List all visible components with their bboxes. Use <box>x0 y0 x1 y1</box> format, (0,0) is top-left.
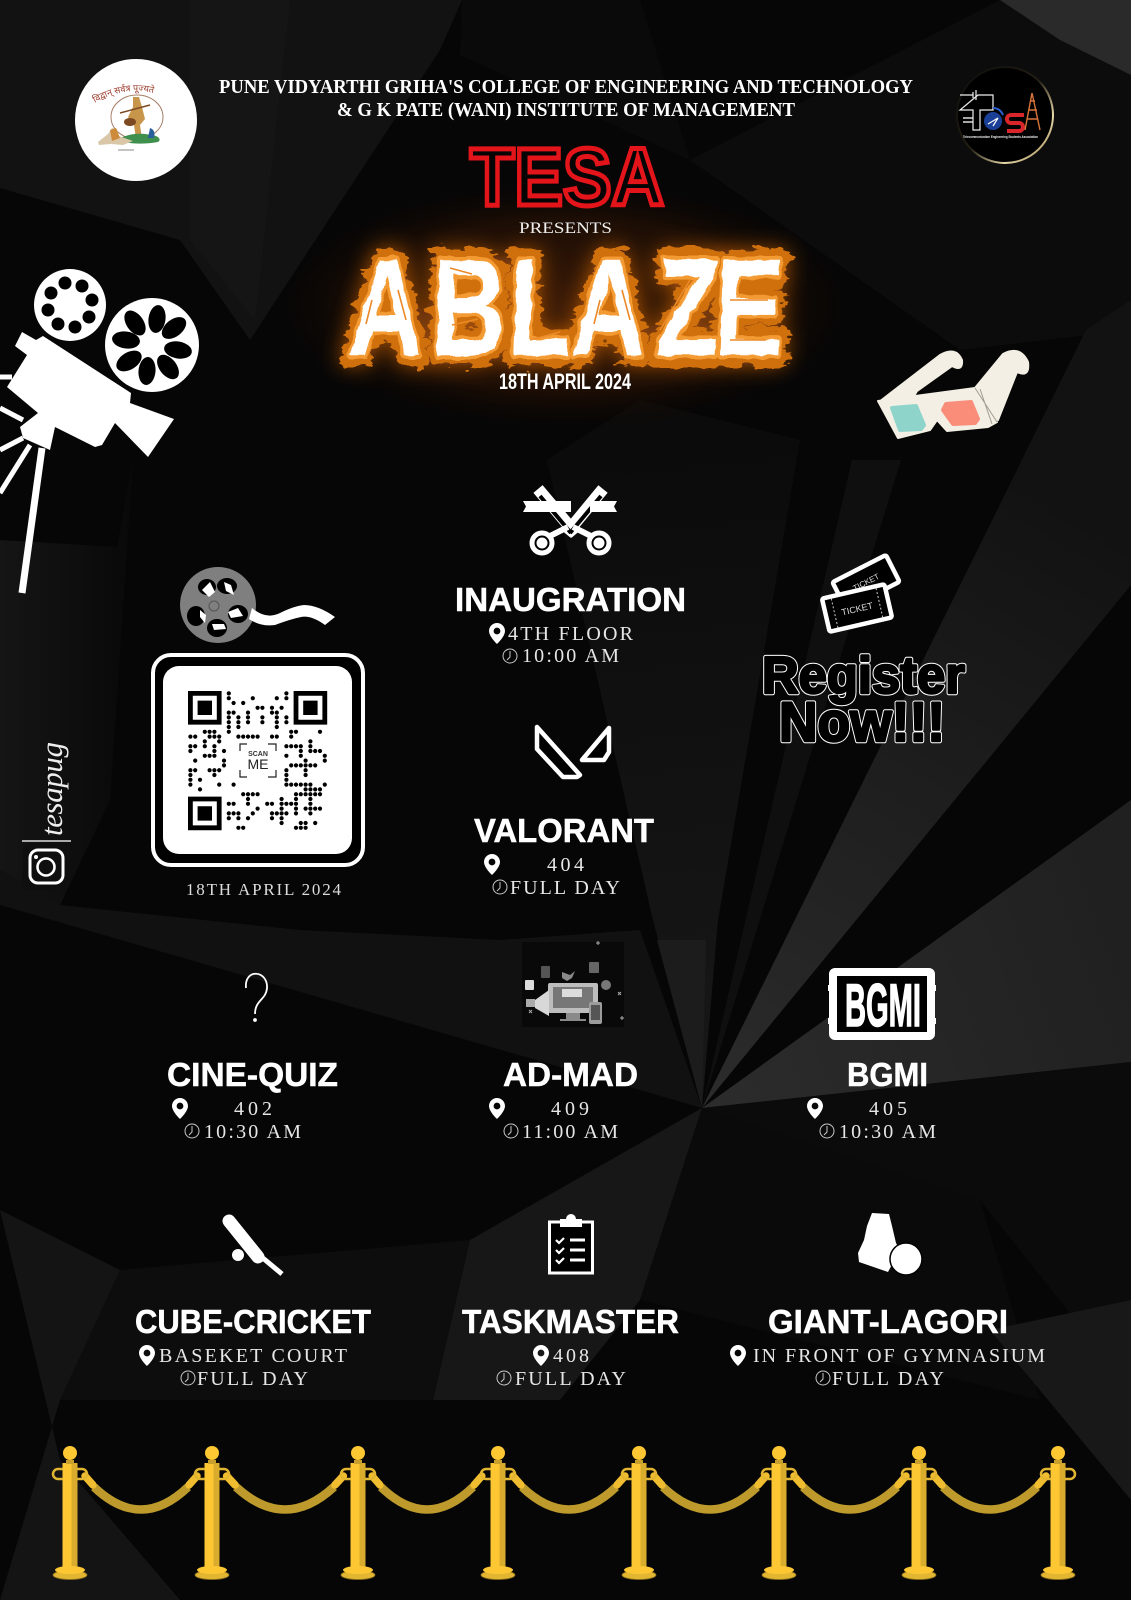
title: ABLAZE flaming: ABLAZE <box>346 231 787 384</box>
heading: VALORANT <box>474 812 654 849</box>
heading: TASKMASTER <box>462 1303 679 1340</box>
icon: clock <box>181 1371 195 1385</box>
time: FULL DAY <box>515 1368 626 1390</box>
logo: TESA emblem <box>957 67 1053 163</box>
icon: lagori stones and ball <box>858 1213 922 1275</box>
location: 402 <box>234 1098 272 1120</box>
icon: tickets: TICKET <box>852 572 881 593</box>
icon: location pin <box>807 1098 823 1119</box>
icon: clock <box>493 880 507 894</box>
icon: clock <box>504 1124 518 1138</box>
rope barrier stanchions <box>53 1446 1075 1580</box>
icon: clock <box>185 1124 199 1138</box>
logo: college emblem <box>75 59 197 181</box>
QR modules <box>190 693 325 828</box>
icon: advertising monitor <box>522 941 624 1027</box>
location: 408 <box>553 1345 589 1367</box>
icon: location pin <box>139 1345 155 1366</box>
location: 409 <box>551 1098 589 1120</box>
icon: BGMI badge: BGMI <box>845 972 921 1039</box>
title: ABLAZE flaming: ABLAZE <box>346 231 787 384</box>
icon: valorant logo <box>537 727 609 777</box>
QR centre scan me: SCAN <box>248 751 268 758</box>
icon: tickets <box>822 555 900 632</box>
panel: ad-mad <box>489 941 638 1143</box>
panel: valorant <box>474 727 654 899</box>
icon: BGMI badge <box>828 972 936 1039</box>
panel: inaugration <box>455 489 686 667</box>
panel: QR code <box>153 655 363 865</box>
icon: cricket bat and ball <box>229 1221 282 1274</box>
text: register now: Register <box>762 647 965 705</box>
time: FULL DAY <box>510 877 620 899</box>
icon: location pin <box>489 623 505 644</box>
location: BASEKET COURT <box>159 1345 347 1367</box>
panel: bgmi <box>807 972 936 1143</box>
heading: college name <box>219 76 914 121</box>
icon: location pin <box>484 854 500 875</box>
text: presents: PRESENTS <box>519 220 612 237</box>
QR centre scan me <box>240 744 276 777</box>
heading: college name: PUNE VIDYARTHI GRIHA'S COLLEGE OF ENGINEERING AND TECHNOLOGY <box>219 76 914 98</box>
icon: clock <box>503 649 517 663</box>
icon: scissors and ribbon <box>523 489 617 553</box>
text: QR date: 18TH APRIL 2024 <box>186 880 342 899</box>
title: ABLAZE flaming: ABLAZE <box>346 231 787 384</box>
heading: BGMI <box>847 1056 928 1093</box>
heading: INAUGRATION <box>455 581 686 618</box>
time: 10:00 AM <box>522 645 619 667</box>
icon: question mark <box>246 974 267 1021</box>
panel: register call to action <box>762 555 965 753</box>
time: 11:00 AM <box>522 1121 618 1143</box>
panel: giant-lagori <box>730 1213 1045 1390</box>
text: register now: Now!!! <box>779 690 945 753</box>
time: FULL DAY <box>197 1368 308 1390</box>
heading: CINE-QUIZ <box>167 1056 338 1093</box>
location: 405 <box>869 1098 907 1120</box>
logo: TESA emblem: Telecommunication Engineering Students Association <box>963 135 1038 139</box>
location: 4TH FLOOR <box>508 623 634 645</box>
location: 404 <box>547 854 584 876</box>
heading: GIANT-LAGORI <box>768 1303 1008 1340</box>
text: register now: Now!!! <box>779 690 945 753</box>
text: register now <box>762 647 965 753</box>
panel: cine-quiz <box>167 974 338 1143</box>
heading: college name: & G K PATE (WANI) INSTITUTE OF MANAGEMENT <box>337 99 796 121</box>
icon: clipboard checklist <box>550 1214 592 1273</box>
icon: film camera <box>0 269 199 593</box>
time: 10:30 AM <box>204 1121 301 1143</box>
panel: taskmaster <box>462 1214 679 1390</box>
icon: film reel <box>180 567 335 643</box>
icon: clock <box>816 1371 830 1385</box>
text: register now: Register <box>762 647 965 705</box>
icon: location pin <box>172 1098 188 1119</box>
heading: AD-MAD <box>503 1056 638 1093</box>
social: instagram handle <box>22 742 71 890</box>
title: TESA: TESA <box>470 132 664 223</box>
icon: location pin <box>489 1098 505 1119</box>
panel: cube-cricket <box>135 1221 371 1390</box>
icon: location pin <box>533 1345 549 1366</box>
icon: clock <box>497 1371 511 1385</box>
location: IN FRONT OF GYMNASIUM <box>753 1345 1045 1367</box>
icon: location pin <box>730 1345 746 1366</box>
time: 10:30 AM <box>839 1121 936 1143</box>
social: instagram handle: tesapug <box>34 742 69 836</box>
heading: CUBE-CRICKET <box>135 1303 371 1340</box>
time: FULL DAY <box>832 1368 944 1390</box>
logo: college emblem: विद्वान् सर्वत्र पूज्यते <box>92 84 155 102</box>
icon: 3D glasses <box>878 351 1028 438</box>
text: event date: 18TH APRIL 2024 <box>499 369 632 394</box>
icon: tickets: TICKET <box>841 600 874 617</box>
QR centre scan me: ME <box>248 756 268 772</box>
icon: clock <box>820 1124 834 1138</box>
title: ABLAZE flaming: ABLAZE <box>346 231 787 384</box>
